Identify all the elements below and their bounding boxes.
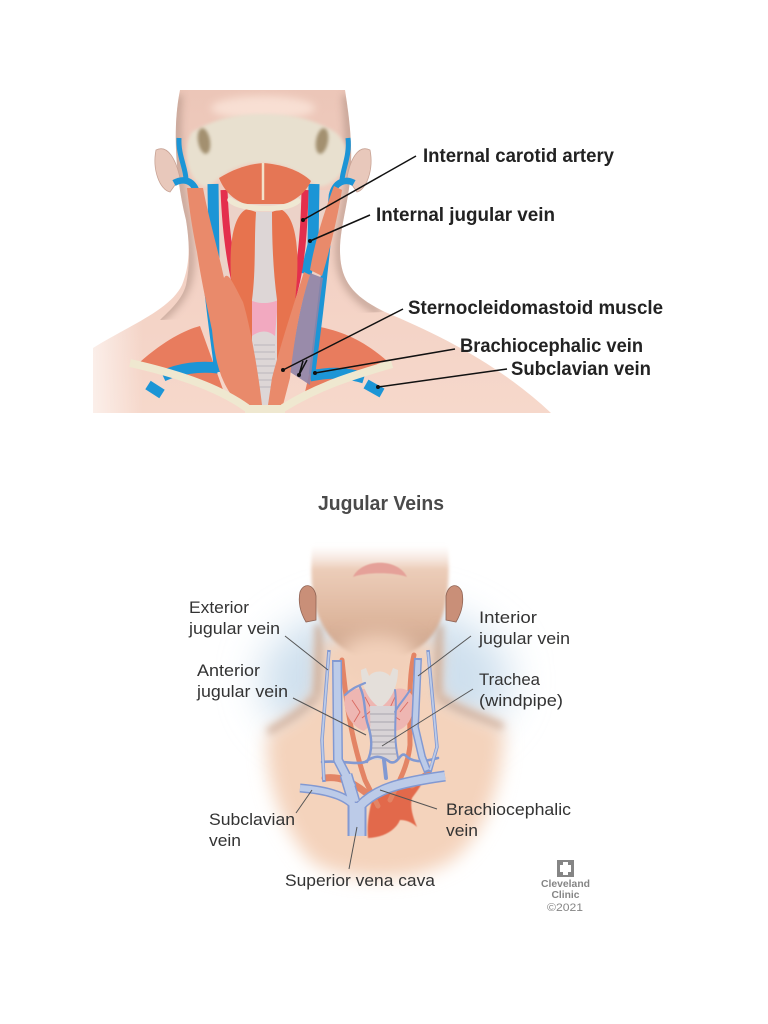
neck side shading: [317, 625, 440, 695]
head and face: [311, 545, 449, 655]
jugular vein outlines: [322, 650, 437, 787]
label: Sternocleidomastoid muscle: Sternocleidomastoid muscle: [408, 298, 663, 319]
vein highlights: [300, 652, 445, 836]
sternum top: [245, 405, 285, 413]
thyroid cartilage: [361, 668, 398, 708]
thyroid gland: [344, 689, 413, 731]
internal jugular veins: [174, 138, 354, 374]
lips: [353, 563, 407, 577]
label: Brachiocephalic vein: Brachiocephalic: [446, 800, 572, 819]
label: Trachea (windpipe): (windpipe): [479, 691, 563, 710]
midline raphe: [262, 163, 264, 200]
larynx and trachea: [252, 212, 277, 405]
label: Exterior jugular vein: [188, 598, 328, 670]
label: Anterior jugular vein: jugular vein: [196, 682, 288, 701]
small jugular branches: [322, 683, 438, 778]
infographic canvas: [93, 90, 662, 911]
neck inner pale area: [204, 190, 330, 208]
transparent cut muscle: [290, 273, 323, 385]
label: Internal jugular vein: Internal jugular vein: [376, 205, 555, 226]
label: Superior vena cava: [285, 827, 436, 890]
chin highlight: [211, 96, 315, 120]
label: Internal carotid artery: Internal carotid artery: [423, 146, 614, 167]
floor of mouth muscle: [219, 163, 311, 204]
label: Interior jugular vein: [418, 608, 570, 676]
icon: cross in square: [557, 860, 574, 877]
thyroid gland: [252, 300, 277, 336]
trachea rings: [370, 714, 396, 754]
label: Exterior jugular vein: Exterior: [189, 598, 249, 617]
neck front highlight: [336, 634, 420, 686]
label: Subclavian vein: Subclavian: [209, 810, 295, 829]
jaw bone: [187, 114, 347, 187]
logo: Cleveland Clinic: Clinic: [552, 889, 580, 901]
logo: Cleveland Clinic: [541, 860, 590, 914]
internal carotid arteries: [224, 190, 305, 312]
head and neck side shading: [150, 95, 380, 325]
shoulder muscles: [140, 326, 223, 389]
illustration: jugular vein system: [260, 545, 510, 878]
strap muscles: [230, 210, 256, 340]
label: Interior jugular vein: Interior: [479, 608, 537, 627]
label: Subclavian vein: [209, 790, 312, 850]
ears: [299, 586, 463, 622]
label: Subclavian vein: Subclavian vein: [511, 359, 651, 380]
subclavian and brachiocephalic veins: [148, 367, 382, 394]
label: Exterior jugular vein: jugular vein: [188, 619, 280, 638]
carotid arteries and branches: [325, 655, 428, 806]
label: Anterior jugular vein: [196, 661, 366, 735]
label: Sternocleidomastoid muscle: [281, 298, 663, 372]
hyoid bone: [230, 200, 298, 208]
label: Interior jugular vein: jugular vein: [478, 629, 570, 648]
sternocleidomastoid muscle right cut end: [310, 186, 342, 276]
label: Anterior jugular vein: Anterior: [197, 661, 260, 680]
label: Superior vena cava: Superior vena cava: [285, 871, 436, 890]
trachea rings: [254, 345, 275, 387]
lower muscle head: [268, 272, 310, 405]
shoulder light fade: [93, 328, 130, 413]
illustration: neck anatomy front view: [93, 90, 551, 413]
aorta: [368, 780, 423, 838]
shoulder slope shading: [268, 695, 503, 732]
blue background halo: [260, 605, 510, 755]
label: Brachiocephalic vein: Brachiocephalic vein: [460, 336, 643, 357]
label: Brachiocephalic vein: [380, 790, 572, 840]
label: Subclavian vein: vein: [209, 831, 241, 850]
title: Jugular Veins: Jugular Veins: [318, 493, 444, 515]
thyroid vessels: [352, 697, 408, 722]
label: Internal carotid artery: [301, 146, 614, 222]
label: Subclavian vein: [376, 359, 651, 389]
sternocleidomastoid muscle left: [187, 188, 262, 405]
ears: [155, 149, 371, 192]
body skin: [267, 640, 503, 878]
logo: Cleveland Clinic: ©2021: [547, 902, 583, 914]
label: Trachea (windpipe): [382, 670, 563, 746]
brachiocephalic, subclavian veins and superior vena cava outline: [300, 775, 445, 836]
trachea: [370, 706, 396, 760]
label: Internal jugular vein: [308, 205, 555, 243]
logo: Cleveland Clinic: Cleveland: [541, 878, 590, 890]
skin: head, neck and shoulders: [93, 90, 551, 413]
label: Trachea (windpipe): Trachea: [479, 670, 541, 689]
collar bones: [130, 363, 392, 408]
label: Brachiocephalic vein: vein: [446, 821, 478, 840]
jaw bone shadow holes: [196, 127, 330, 155]
label: Brachiocephalic vein: [297, 336, 643, 377]
